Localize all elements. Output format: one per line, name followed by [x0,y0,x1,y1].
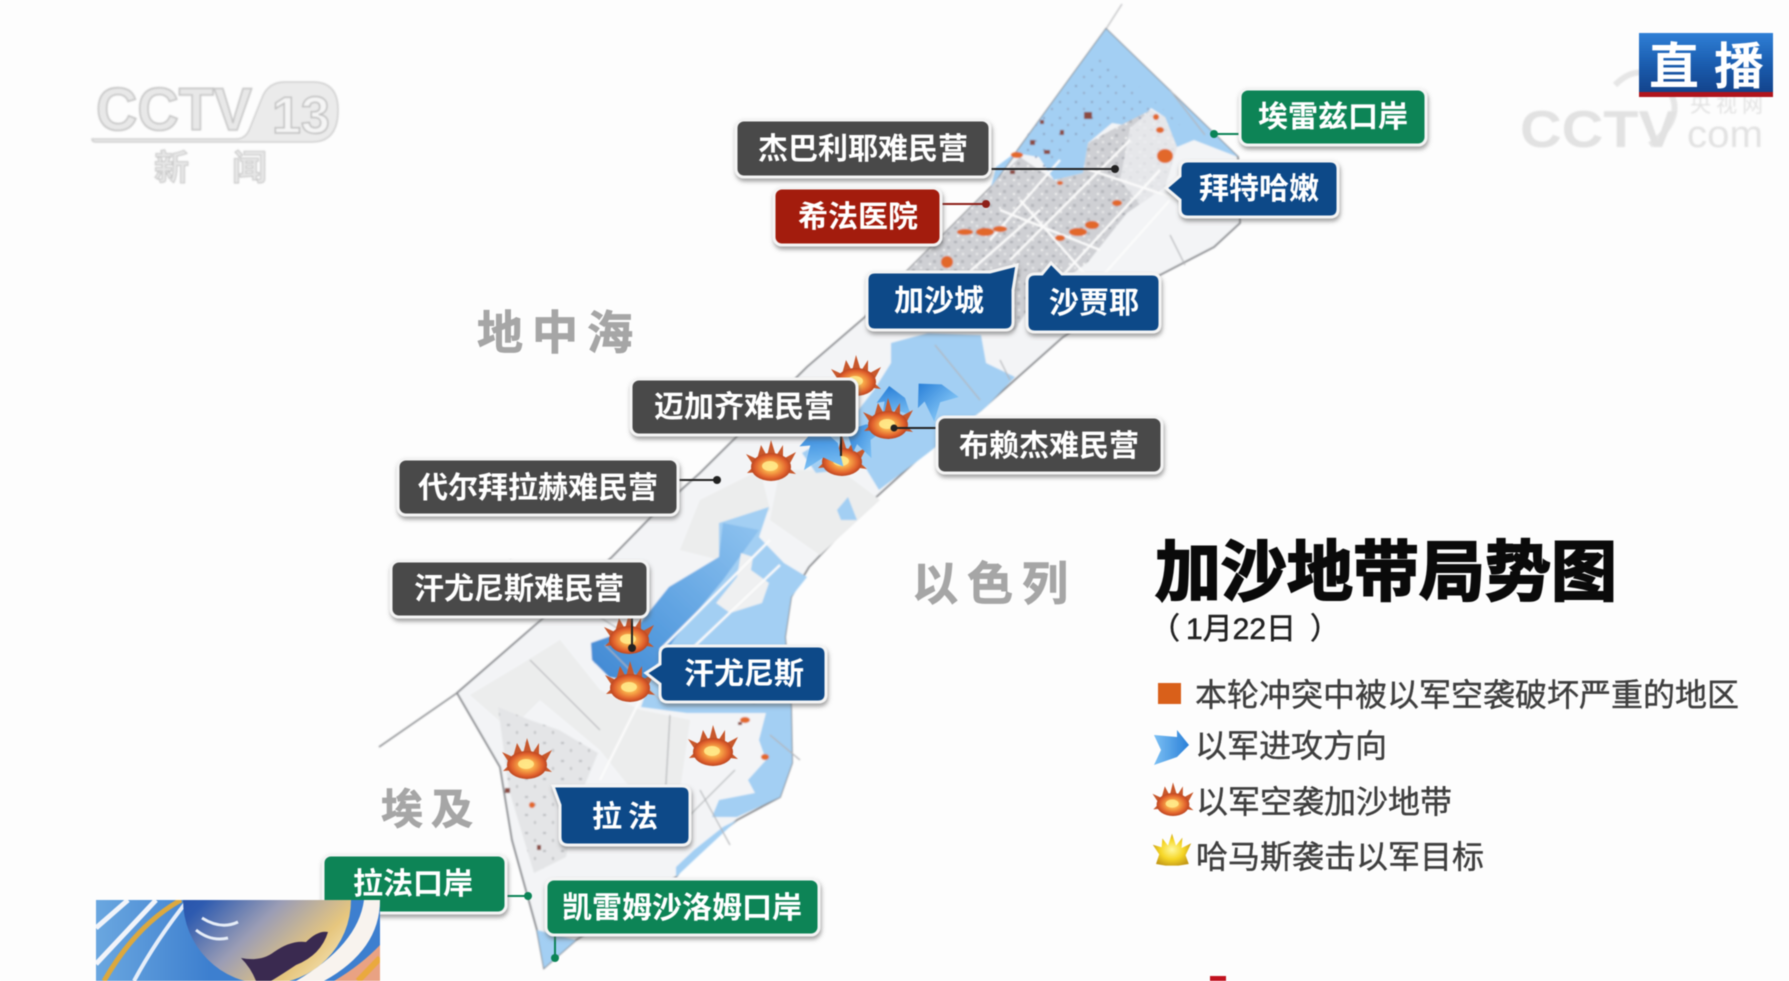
badge: live: 播 [1714,39,1764,95]
date: （ [1150,613,1180,646]
field lines [510,90,1205,845]
label: Rafah crossing [323,855,506,913]
legend icon: advance arrow [1154,730,1189,765]
logo: CCTV 13 news: 13 [272,87,330,145]
logo: CCTV 13 news: 闻 [232,149,267,188]
white island [716,553,769,613]
legend [1152,677,1739,875]
title: 加沙地带局势图 [1155,535,1617,609]
label: Kerem Shalom crossing [546,879,819,935]
watermark: CCTV.com: com [1687,114,1763,156]
label: Khan Younis camp: 汗尤尼斯难民营 [414,573,624,606]
label: Bureij camp: 布赖杰难民营 [959,430,1139,463]
logo: CCTV 13 news: CCTV [96,76,252,143]
roads [600,140,1180,780]
label: Khan Younis [646,646,826,702]
watermark: CCTV.com: CCTV [1520,101,1677,159]
legend text: Hamas attack: 哈马斯袭击以军目标 [1196,839,1484,875]
dark damage speckles [505,112,1092,850]
legend text: destroyed area: 本轮冲突中被以军空袭破坏严重的地区 [1195,677,1739,713]
Gaza City urban area [880,110,1177,330]
small blue zones [537,497,857,968]
label: Bureij camp [937,417,1162,473]
watermark: CCTV.com [1520,72,1768,159]
Beit Hanoun pale lobe [1120,110,1177,205]
label: Shifa hospital [774,188,941,245]
Rafah urban area [498,707,598,873]
map: Gaza Strip [379,4,1240,968]
label: Shifa hospital: 希法医院 [798,201,918,234]
explosions: airstrikes on map [502,355,881,779]
label: Rafah [553,786,690,845]
label: Erez crossing: 埃雷兹口岸 [1258,101,1408,134]
label: Beit Hanoun: 拜特哈嫩 [1199,173,1319,206]
Egypt border line [379,693,457,747]
geo label: Israel: 以色列 [912,558,1077,610]
logo: CCTV 13 news [92,76,338,188]
date: ） [1310,613,1340,646]
connector lines [506,130,1240,962]
badge: live: 直 [1649,39,1699,95]
legend icon: destroyed area [1158,683,1181,704]
strip base outline [457,29,1240,968]
blue zone middle [802,333,1015,490]
label: Shujaiya: 沙贾耶 [1049,287,1139,320]
legend icon: Hamas attack [1153,834,1191,866]
geo label: Mediterranean: 地中海 [477,307,642,359]
blue zone south [591,507,807,817]
label: Rafah crossing: 拉法口岸 [353,868,473,901]
label: Khan Younis: 汗尤尼斯 [684,658,804,691]
label: Maghazi camp: 迈加齐难民营 [654,391,834,424]
label: Kerem Shalom crossing: 凯雷姆沙洛姆口岸 [562,892,802,925]
dark blue advance zone [591,523,759,683]
label: Maghazi camp [631,379,857,435]
legend text: advance: 以军进攻方向 [1195,728,1387,764]
explosion on top of arrows: Bureij [863,398,913,439]
Israel north border line [1106,4,1122,29]
north blue speckle [1010,50,1180,170]
label: Gaza City [867,265,1017,330]
destroyed areas (orange) [529,114,1173,808]
legend icon: airstrike [1152,782,1194,816]
label: Beit Hanoun [1166,161,1338,217]
Central and Khan Younis sparse areas [470,470,880,800]
label: Jabalia camp: 杰巴利耶难民营 [758,133,968,166]
watermark: CCTV.com: 央视网 [1690,94,1768,117]
badge: live [1639,33,1773,97]
date: 1月22日 [1186,613,1296,646]
label: Deir al-Balah camp: 代尔拜拉赫难民营 [418,472,658,505]
red mark at bottom edge [1210,976,1226,981]
label: Rafah: 拉法 [592,801,664,834]
blue zone north [991,29,1238,187]
thumbnail: globe graphic [95,899,381,981]
legend text: airstrike: 以军空袭加沙地带 [1196,784,1452,820]
logo: CCTV 13 news: 新 [154,149,189,188]
geo label: Egypt: 埃及 [381,786,481,833]
label: Erez crossing [1240,89,1426,145]
arrows: Israeli advance [798,370,959,470]
label: Deir al-Balah camp [398,459,678,515]
label: Jabalia camp [736,120,990,177]
label: Gaza City: 加沙城 [894,285,984,318]
label: Shujaiya [1027,263,1160,332]
label: Khan Younis camp [391,561,648,617]
